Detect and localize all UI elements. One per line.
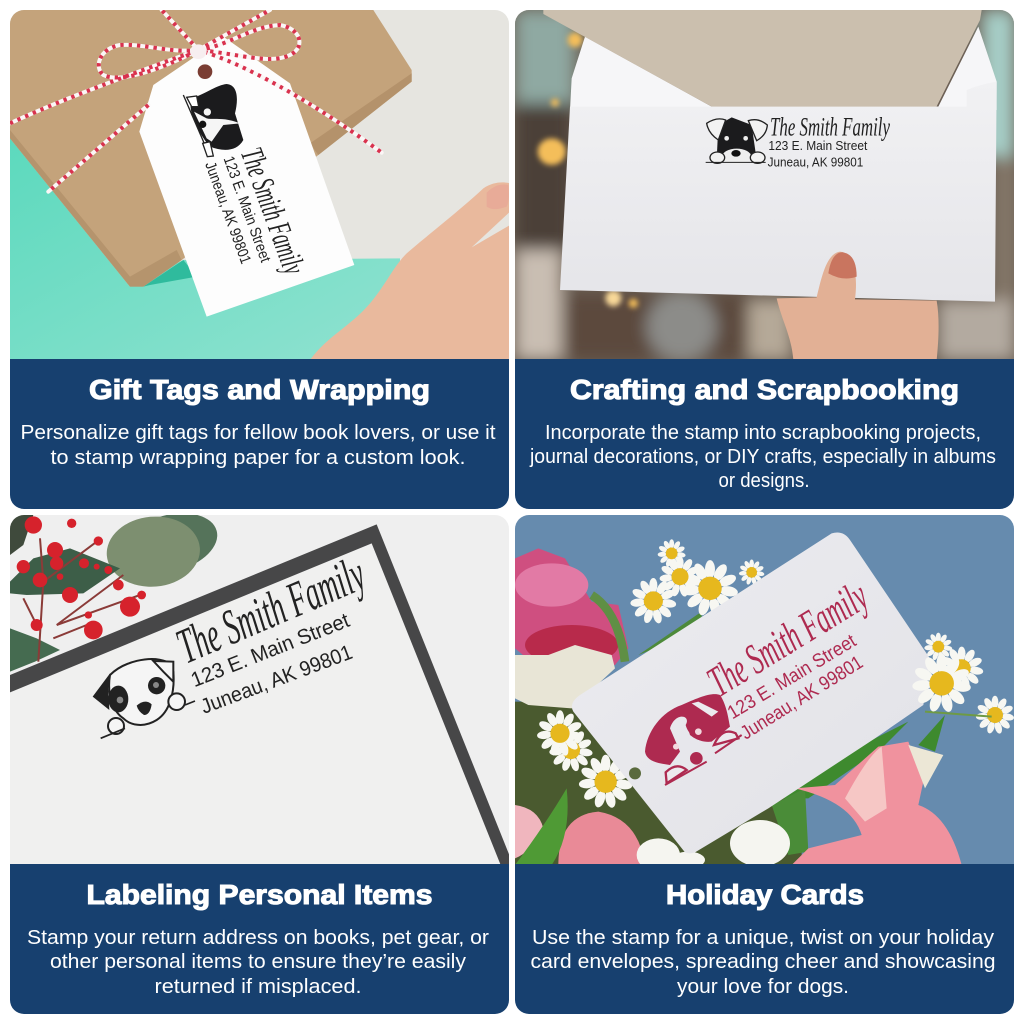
body text [530, 926, 996, 998]
body text: Stamp your return address on books, pet gear, or [27, 926, 489, 949]
photo: gift tag on wrapped box [10, 10, 510, 360]
caption band [515, 359, 1014, 509]
body text: other personal items to ensure they’re easily [50, 950, 467, 973]
body text: or designs. [718, 469, 810, 492]
caption band [515, 864, 1014, 1014]
kraft box [10, 10, 412, 287]
caption band [10, 864, 509, 1014]
book page [10, 543, 501, 865]
stamp text on tag [206, 147, 304, 272]
icon: spaniel puppy [645, 694, 742, 785]
twine bow [10, 10, 382, 192]
body text: returned if misplaced. [154, 975, 362, 998]
panel: labeling personal items [10, 503, 513, 1014]
body text [20, 421, 496, 469]
body text: journal decorations, or DIY crafts, especially in albums [529, 445, 996, 468]
stamp: address: 123 E. Main Street [768, 139, 868, 153]
photo: envelope with address stamp [515, 10, 1015, 362]
body text: Personalize gift tags for fellow book lovers, or use it [20, 421, 496, 444]
stamp text on tag: The Smith Family [234, 143, 313, 279]
stamp: address [706, 585, 868, 739]
body text: Use the stamp for a unique, twist on your holiday [532, 926, 995, 949]
stamp: address: Juneau, AK 99801 [737, 652, 867, 744]
stamp: address: The Smith Family [770, 112, 890, 141]
stamp: address [768, 117, 890, 168]
panel: crafting and scrapbooking [515, 10, 1015, 509]
blurred background [515, 10, 1015, 362]
panel: holiday cards [515, 515, 1015, 1014]
body text: card envelopes, spreading cheer and showcasing [530, 950, 996, 973]
stamp: address: Juneau, AK 99801 [198, 641, 356, 719]
panel: gift tags and wrapping [10, 10, 510, 509]
envelope flap [570, 27, 997, 110]
body text: Incorporate the stamp into scrapbooking projects, [545, 421, 981, 444]
icon: peeking dog [183, 84, 243, 157]
daisies [537, 539, 1014, 809]
caption band [10, 359, 509, 509]
white card [572, 532, 931, 853]
icon: hand [310, 182, 510, 360]
heading: Crafting and Scrapbooking [570, 374, 959, 405]
photo: stamped book page with flowers [10, 503, 513, 865]
stamp text on tag: 123 E. Main Street [220, 154, 274, 265]
stamp: address: 123 E. Main Street [724, 630, 861, 724]
bouquet background [515, 548, 962, 872]
heading: Labeling Personal Items [86, 879, 432, 910]
body text: your love for dogs. [677, 975, 849, 998]
heading: Gift Tags and Wrapping [89, 374, 430, 405]
book cover [10, 524, 513, 865]
stamp: address: 123 E. Main Street [188, 609, 353, 692]
envelope body [560, 82, 997, 302]
heading: Holiday Cards [666, 879, 864, 910]
stamp: address: The Smith Family [168, 545, 373, 674]
stamp text on tag: Juneau, AK 99801 [201, 160, 254, 266]
body text [529, 421, 996, 492]
icon: hand [777, 252, 939, 360]
icon: schnauzer dog [706, 117, 767, 165]
flowers and leaves [10, 503, 224, 672]
body text: to stamp wrapping paper for a custom look. [50, 446, 466, 469]
kraft insert card [543, 10, 982, 108]
stamp: address: The Smith Family [699, 572, 877, 706]
stamp: address [176, 560, 363, 713]
photo: card in bouquet [515, 515, 1015, 872]
stamp: address: Juneau, AK 99801 [768, 156, 863, 170]
body text [27, 926, 489, 998]
icon: puppy [93, 659, 195, 738]
gift tag [139, 37, 354, 317]
